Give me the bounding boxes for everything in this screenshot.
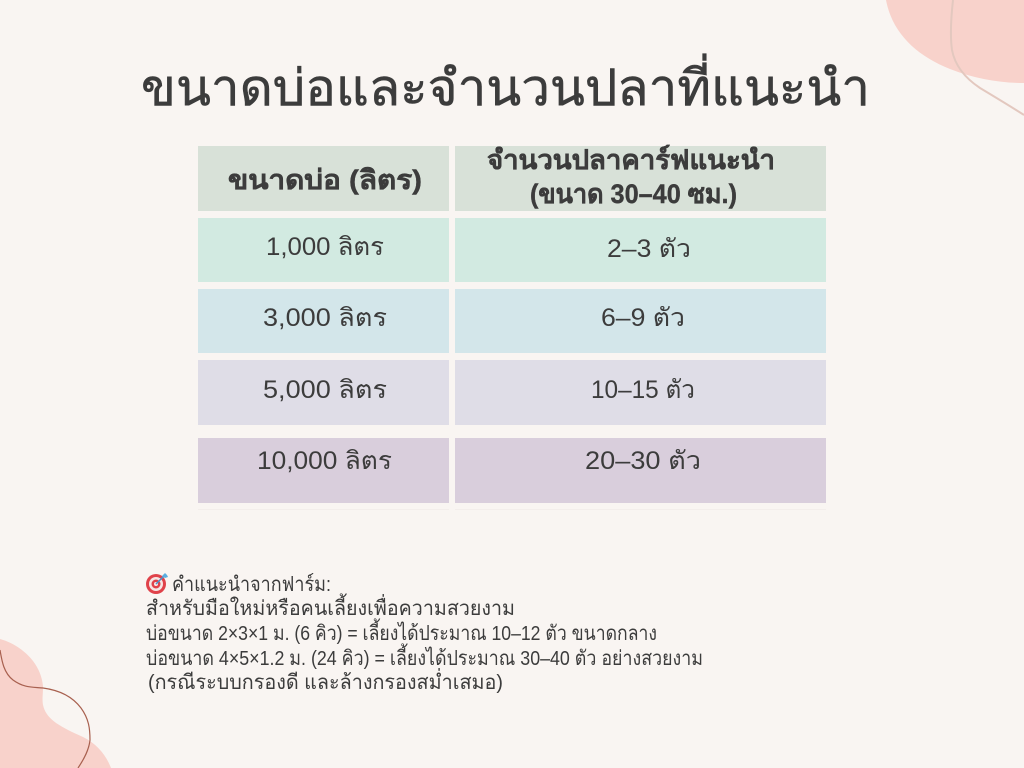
row: 3,000 litres: 6–9 ตัว [601,304,685,332]
header: recommended fish count: จำนวนปลาคาร์ฟแนะนำ [487,144,775,175]
decoration: bottom left blob [0,639,111,768]
header: pond size: ขนาดบ่อ (ลิตร) [228,165,422,195]
row: 10,000 litres [198,438,826,503]
farm advice note: บ่อขนาด 2×3×1 ม. (6 คิว) = เลี้ยงได้ประมาณ 10–12 ตัว ขนาดกลาง [146,618,657,645]
row: 5,000 litres: 10–15 ตัว [591,376,695,404]
row: 5,000 litres: 5,000 ลิตร [263,376,387,404]
farm advice note [146,573,703,694]
table [198,144,826,510]
row: 3,000 litres: 3,000 ลิตร [263,304,387,332]
row: 1,000 litres: 1,000 ลิตร [266,233,384,261]
row: 10,000 litres: 20–30 ตัว [585,447,701,475]
icon: dart target [146,573,168,594]
farm advice note: สำหรับมือใหม่หรือคนเลี้ยงเพื่อความสวยงาม [146,593,515,620]
row: 3,000 litres [198,289,826,353]
farm advice note: บ่อขนาด 4×5×1.2 ม. (24 คิว) = เลี้ยงได้ประมาณ 30–40 ตัว อย่างสวยงาม [146,643,703,670]
row: 1,000 litres: 2–3 ตัว [607,235,691,263]
row: 5,000 litres [198,360,826,425]
farm advice note: คำแนะนำจากฟาร์ม: [172,573,331,596]
row: 10,000 litres: 10,000 ลิตร [257,447,392,475]
farm advice note: (กรณีระบบกรองดี และล้างกรองสม่ำเสมอ) [148,668,503,694]
title: ขนาดบ่อและจำนวนปลาที่แนะนำ [141,54,870,116]
header: pond size [198,146,449,211]
header: recommended fish count: (ขนาด 30–40 ซม.) [530,179,737,209]
row: 1,000 litres [198,218,826,282]
header: recommended fish count [455,144,826,211]
decoration: top right blob [886,0,1024,115]
